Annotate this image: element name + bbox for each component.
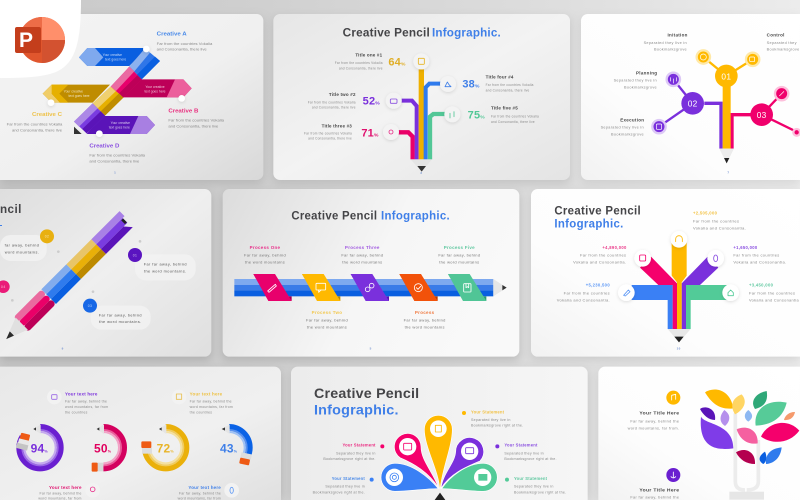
planning	[614, 70, 657, 89]
label: Creative B	[168, 109, 224, 129]
callout 02: far away, behind	[5, 244, 39, 248]
text: purple: Far far away, behind the	[65, 399, 107, 403]
title five	[491, 106, 539, 124]
statement pink: Bookmarksgrove right at the.	[323, 457, 376, 461]
execution: Execution	[620, 117, 644, 122]
panel: diagonal pencil	[0, 189, 211, 357]
callout 03: 03	[88, 304, 92, 308]
execution	[601, 117, 644, 136]
percent 75: 75%	[468, 110, 485, 122]
initiation: Separated they live in	[644, 41, 687, 45]
node 02: 02	[688, 99, 698, 109]
stat: 2,505,000	[693, 211, 746, 231]
title three: Far from the countries Vokalia	[304, 131, 352, 135]
icons	[383, 53, 460, 140]
statement purple	[495, 443, 557, 461]
label: Creative C	[7, 112, 62, 132]
label: Creative B: Creative B	[168, 109, 199, 115]
leaves	[700, 390, 799, 464]
percent 71: 71%	[361, 127, 379, 139]
horizontal pencil	[234, 279, 507, 296]
text: blue: Your text here	[188, 485, 221, 490]
text: gold: Far far away, behind the	[190, 399, 232, 403]
label: Creative B: and Consonantia, there live	[168, 125, 218, 129]
statement green: Bookmarksgrove right at the.	[514, 490, 566, 494]
planning: Separated they live in	[614, 79, 657, 83]
statement purple: Separated they live in	[504, 451, 544, 455]
donut 94: 94%	[31, 441, 48, 455]
page number: 9	[62, 347, 64, 351]
stat: 1,650,000: Vokalia and Consonantia.	[733, 260, 787, 265]
title: Creative Pencil	[554, 204, 641, 217]
page number: 2	[420, 171, 422, 175]
diagonal pencil	[74, 48, 160, 134]
stat: 4,890,000: +4,890,000	[602, 245, 627, 250]
title three	[304, 123, 352, 141]
stat: 1,650,000: Far from the countries	[733, 253, 780, 258]
title five: Far from the countries Vokalia	[491, 114, 539, 118]
band text: Your creative	[111, 121, 130, 125]
markers	[48, 46, 185, 137]
execution: Separated they live in	[601, 126, 644, 130]
title one: Far from the countries Vokalia	[335, 61, 383, 65]
panel: creative pencil percentages	[273, 14, 570, 180]
label: Creative C: Creative C	[32, 112, 62, 118]
process four: Process	[415, 310, 435, 315]
label: Creative D: and Consonantia, there live	[89, 159, 139, 163]
label: Creative D: Creative D	[89, 143, 120, 149]
page number: 5	[370, 347, 372, 351]
callout 03: the word mountains.	[99, 320, 142, 324]
donut 72	[141, 424, 187, 469]
text: blue: Far far away, behind the	[179, 492, 221, 496]
connector dots	[11, 240, 141, 302]
process three: Far far away, behind	[341, 253, 383, 258]
stat: 5,230,500	[557, 283, 610, 302]
stat: 2,505,000: Vokalia and Consonantia.	[693, 226, 746, 231]
process two: Process Two	[312, 310, 342, 315]
initiation: Bookmarksgrove	[654, 48, 687, 52]
text: purple: Your text here	[65, 392, 98, 397]
planning: Bookmarksgrove	[624, 85, 657, 89]
band text: text goes here	[144, 89, 166, 93]
petals	[381, 415, 497, 500]
callout 03: Far far away, behind	[99, 313, 142, 317]
callout 01: 01	[133, 253, 137, 257]
pencil bars	[398, 69, 445, 172]
control: Separated they	[767, 41, 797, 45]
callout 02	[0, 229, 54, 261]
band text: Your creative	[64, 90, 83, 94]
donut 50	[82, 424, 124, 472]
statement purple: Bookmarksgrove right at the.	[504, 457, 557, 461]
process five	[438, 245, 480, 265]
pink band	[123, 79, 192, 97]
panel: process pencil	[223, 189, 519, 357]
title two	[308, 92, 356, 110]
statement green: Separated they live in	[514, 485, 554, 489]
text: blue	[178, 483, 239, 500]
statement blue: Your Statement	[332, 476, 365, 481]
title block 1: word mountains, far from.	[628, 427, 679, 431]
title five: Title five #5	[491, 106, 518, 111]
title four: and Consonantia, there live	[486, 89, 530, 93]
statement green: Your Statement	[514, 476, 548, 481]
donut 94	[16, 424, 61, 469]
process three: the word mountains	[342, 260, 382, 265]
statement gold: Bookmarksgrove right at the.	[471, 424, 523, 428]
ribbons	[253, 274, 486, 301]
percent 38: 38%	[462, 79, 480, 91]
process five: the word mountains	[439, 260, 479, 265]
donut 50: 50%	[94, 441, 112, 455]
band text: text goes here	[105, 58, 126, 62]
band text: Your creative	[103, 53, 122, 57]
process four	[404, 310, 446, 330]
title three: Title three #3	[322, 123, 352, 128]
panel: process tree	[581, 14, 800, 180]
purple band	[87, 116, 155, 134]
logo: PowerPoint	[0, 0, 81, 78]
title block 1: Far far away, behind the	[630, 420, 679, 424]
node 01	[715, 65, 738, 87]
band text	[64, 53, 166, 130]
callout 02: 02	[45, 235, 49, 239]
panel: fan pencil	[531, 189, 800, 357]
stat: 1,650,000	[733, 245, 787, 265]
statement pink: Separated they live in	[336, 451, 376, 455]
text: gold: Your text here	[190, 392, 223, 397]
text: gold	[172, 390, 233, 414]
statement pink: Your Statement	[342, 443, 376, 448]
callout 02: word mountains.	[5, 250, 39, 254]
panel: pencil donuts	[0, 367, 281, 500]
statement blue: Separated they live in	[325, 485, 365, 489]
statement blue	[313, 476, 374, 494]
vase stems	[729, 413, 764, 500]
branches	[659, 57, 798, 163]
stat: 4,890,000	[573, 245, 627, 265]
title block 2: Far far away, behind the	[630, 496, 679, 500]
stat: 5,230,500: Far from the countries	[564, 290, 610, 295]
title one	[335, 53, 383, 70]
page number: 10	[677, 347, 681, 351]
statement blue: Bookmarksgrove right at the.	[313, 490, 365, 494]
process five: Far far away, behind	[438, 253, 480, 258]
callout 01: Far far away, behind	[144, 263, 187, 267]
title accent: Infographic.	[432, 27, 501, 40]
process four: Far far away, behind	[404, 318, 446, 323]
page number: 1	[114, 170, 116, 174]
text: purple: the countries	[65, 410, 88, 414]
title: Creative Pencil	[343, 27, 430, 40]
panel: petal pencil	[291, 367, 588, 500]
process three	[341, 245, 383, 265]
text: purple	[47, 390, 108, 414]
stat: 3,450,000: +3,450,000	[749, 283, 774, 288]
title four: Far from the countries Vokalia	[486, 83, 534, 87]
text: gold: the countries	[190, 410, 212, 414]
node 01: 01	[721, 71, 731, 81]
title block 1: Your Title Here	[639, 411, 679, 417]
title two: and Consonantia, there live	[312, 106, 356, 110]
band text: text goes here	[68, 94, 90, 98]
statement green	[505, 476, 566, 494]
text: gold: word mountains, far from	[190, 405, 233, 409]
process three: Process Three	[345, 245, 380, 250]
text: pink	[38, 483, 100, 500]
gold band	[43, 85, 110, 103]
statement purple: Your Statement	[504, 443, 538, 448]
title four: Title four #4	[486, 75, 514, 80]
process two: the word mountains	[307, 325, 347, 330]
title: Creative Pencil	[314, 386, 419, 401]
pencil	[0, 211, 134, 346]
callout 01	[128, 248, 196, 280]
callout 04	[0, 280, 10, 293]
title accent: Infographic.	[314, 403, 399, 418]
title fragment: ncil	[0, 203, 22, 216]
title block 2	[630, 468, 680, 500]
statement pink	[323, 443, 384, 461]
control	[767, 33, 800, 52]
title block 1	[628, 391, 680, 431]
band text: text goes here	[109, 126, 130, 130]
label: Creative B: Far from the countries Vokalia	[168, 119, 224, 123]
petal icons	[386, 420, 491, 486]
label: Creative A: Far from the countries Vokalia	[157, 42, 212, 46]
panel: leaves in vase	[598, 367, 800, 500]
fan icons	[618, 231, 739, 301]
planning: Planning	[636, 70, 657, 75]
percent 52: 52%	[363, 96, 380, 108]
text: purple: word mountains, far from	[65, 405, 108, 409]
title four	[486, 75, 534, 93]
title two: Title two #2	[329, 92, 356, 97]
callout 04: 04	[1, 285, 6, 289]
label: Creative C: Far from the countries Vokalia	[7, 122, 62, 126]
title two: Far from the countries Vokalia	[308, 100, 356, 104]
node 03: 03	[757, 110, 767, 120]
stat: 3,450,000: Vokalia and Consonantia	[749, 297, 799, 302]
process four: the word mountains	[405, 325, 445, 330]
label: Creative A: and Consonantia, there live	[157, 48, 207, 52]
process one: the word mountains	[245, 260, 285, 265]
node 02	[681, 92, 704, 115]
page number: 7	[727, 170, 729, 174]
stat: 4,890,000: Far from the countries	[580, 253, 626, 258]
control: Bookmarksgrove	[767, 48, 800, 52]
title accent fragment	[0, 224, 2, 227]
stat: 2,505,000: +2,505,000	[693, 211, 718, 216]
title one: Title one #1	[355, 53, 383, 58]
stat: 4,890,000: Vokalia and Consonantia.	[573, 260, 626, 265]
stat: 5,230,500: +5,230,500	[586, 283, 610, 288]
process one	[244, 245, 286, 265]
process two: Far far away, behind	[306, 318, 348, 323]
stat: 3,450,000: Far from the countries	[749, 290, 795, 295]
callout 01: the word mountains.	[144, 269, 187, 273]
execution: Bookmarksgrove	[611, 132, 644, 136]
title five: and Consonantia, there live	[491, 120, 535, 124]
process five: Process Five	[444, 245, 475, 250]
control: Control	[767, 33, 785, 38]
statement gold: Your Statement	[471, 409, 505, 414]
statement gold: Separated they live in	[471, 418, 511, 422]
donut 72: 72%	[157, 441, 174, 455]
initiation: Initation	[668, 33, 688, 38]
donut 43: 43%	[220, 441, 238, 455]
logo: PowerPoint: P	[19, 29, 33, 52]
statement gold	[462, 409, 523, 428]
donut 43	[208, 424, 252, 469]
title accent: Infographic.	[554, 218, 624, 231]
title block 2: Your Title Here	[639, 488, 679, 494]
label: Creative A	[157, 32, 212, 52]
label: Creative A: Creative A	[157, 32, 187, 38]
initiation	[644, 33, 688, 52]
text: pink: Your text here	[49, 485, 82, 490]
label: Creative D: Far from the countries Vokalia	[89, 154, 145, 158]
label: Creative C: and Consonantia, there live	[12, 128, 62, 132]
fan bars	[632, 242, 727, 342]
band text: Your creative	[145, 85, 165, 89]
ribbon icons	[268, 283, 471, 292]
blue band	[79, 48, 147, 66]
title one: and Consonantia, there live	[339, 66, 383, 70]
title: Creative Pencil	[291, 209, 377, 222]
stat: 5,230,500: Vokalia and Consonantia.	[557, 297, 610, 302]
process one: Process One	[250, 245, 281, 250]
process one: Far far away, behind	[244, 253, 286, 258]
callout 03	[83, 299, 151, 330]
small nodes	[652, 50, 800, 136]
stat: 1,650,000: +1,650,000	[733, 245, 758, 250]
text: pink: Far far away, behind the	[40, 492, 82, 496]
node 03	[750, 103, 773, 126]
stat: 3,450,000	[749, 283, 799, 302]
label: Creative D	[89, 143, 145, 163]
panel: creative A-D pencil	[0, 14, 263, 180]
percent 64: 64%	[388, 57, 406, 69]
process two	[306, 310, 348, 330]
stat: 2,505,000: Far from the countries	[693, 218, 739, 223]
title three: and Consonantia, there live	[308, 137, 352, 141]
title accent: Infographic.	[381, 209, 450, 222]
